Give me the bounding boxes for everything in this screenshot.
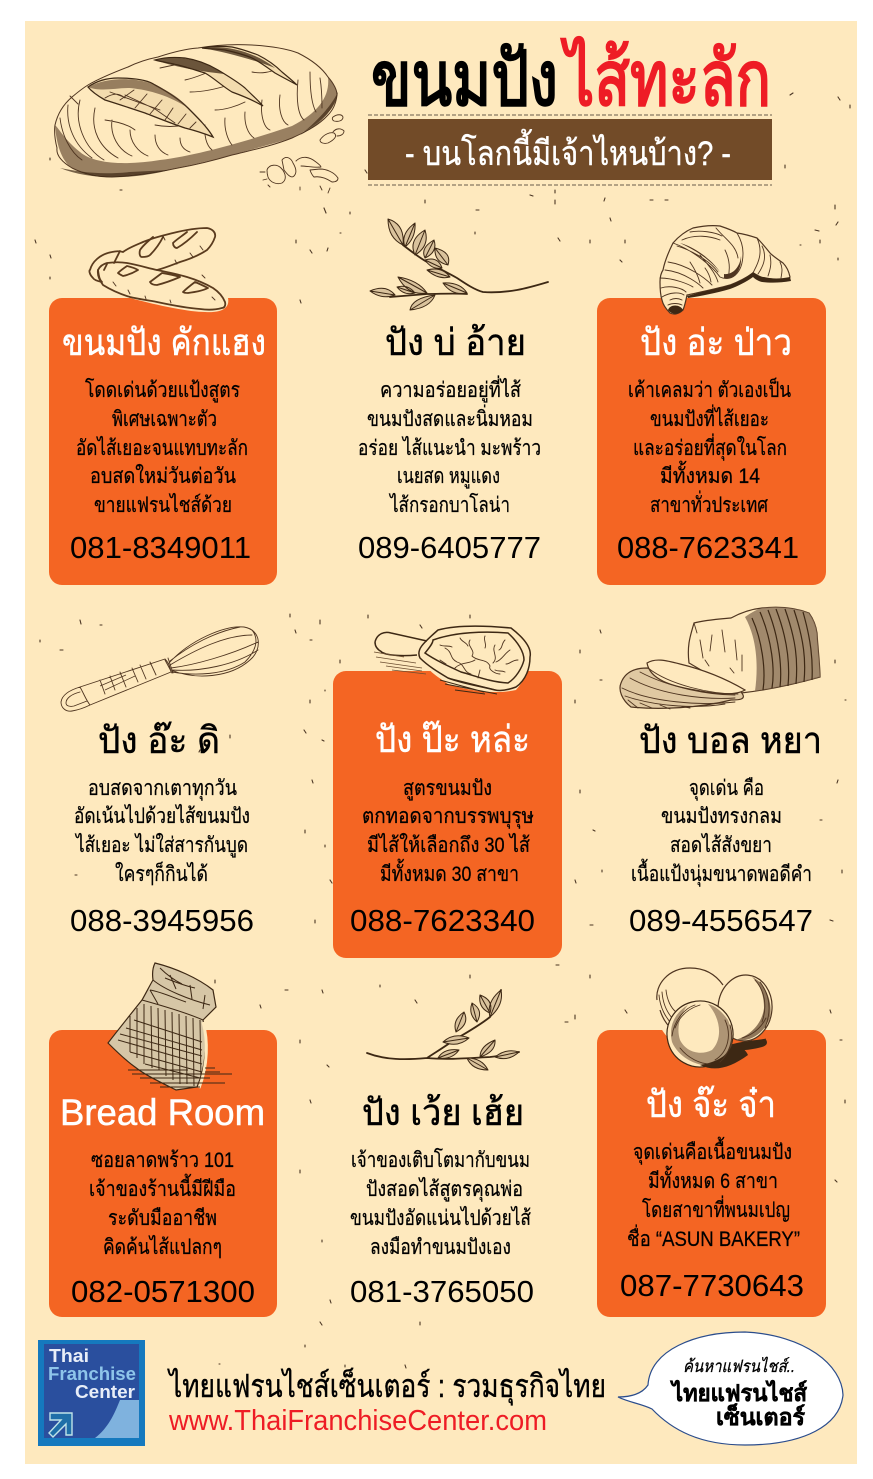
description: ความอร่อยอยู่ที่ไส้ xyxy=(380,375,521,403)
description: สอดไส้สังขยา xyxy=(670,833,772,857)
title xyxy=(371,35,771,122)
description: ขนมปังอัดแน่นไปด้วยไส้ xyxy=(350,1206,531,1230)
heading: ปัง เว้ย เฮ้ย xyxy=(362,1092,524,1133)
heading: ปัง อ๊ะ ดิ xyxy=(98,720,220,761)
panel: ปัง บอล หยา xyxy=(620,607,822,938)
phone: 088-3945956 xyxy=(70,903,254,938)
description: อัดไส้เยอะจนแทบทะลัก xyxy=(76,436,248,460)
phone: 089-4556547 xyxy=(629,903,813,938)
description xyxy=(631,777,812,887)
logo: Thai Franchise Center: Franchise xyxy=(48,1364,136,1384)
phone: 081-8349011 xyxy=(70,530,251,565)
description: เนื้อแป้งนุ่มขนาดพอดีคำ xyxy=(631,859,812,887)
icon: herb sprig xyxy=(370,219,548,310)
description: มีทั้งหมด 14 xyxy=(660,461,760,488)
panel: ปัง ป๊ะ หล่ะ xyxy=(333,626,562,958)
description: ขายแฟรนไชส์ด้วย xyxy=(94,493,232,517)
description: ไส้เยอะ ไม่ใส่สารกันบูด xyxy=(74,833,248,858)
icon: whisk xyxy=(61,627,258,711)
description: ขนมปังที่ไส้เยอะ xyxy=(650,404,769,431)
description: ระดับมืออาชีพ xyxy=(108,1207,217,1230)
footer text: www.ThaiFranchiseCenter.com xyxy=(168,1405,547,1437)
description xyxy=(350,1148,531,1259)
panel: ปัง เว้ย เฮ้ย xyxy=(350,990,534,1309)
description: เจ้าของร้านนี้มีฝีมือ xyxy=(89,1174,236,1201)
icon: eggs xyxy=(657,968,775,1074)
description: พิเศษเฉพาะตัว xyxy=(112,408,217,431)
description xyxy=(76,378,248,517)
phone: 089-6405777 xyxy=(358,530,541,565)
description: เค้าเคลมว่า ตัวเองเป็น xyxy=(628,376,791,402)
heading: ปัง อ่ะ ป่าว xyxy=(640,322,792,363)
description: ปังสอดไส้สูตรคุณพ่อ xyxy=(366,1177,523,1202)
description: ขนมปังสดและนิ่มหอม xyxy=(367,404,533,431)
description: ชื่อ “ASUN BAKERY” xyxy=(627,1224,800,1251)
logo: Thai Franchise Center: Thai xyxy=(49,1346,89,1366)
phone: 082-0571300 xyxy=(71,1274,255,1309)
icon: sliced bread xyxy=(620,607,820,709)
panel: ปัง อ๊ะ ดิ xyxy=(61,627,258,938)
footer text xyxy=(167,1367,606,1437)
footer text: ไทยแฟรนไชส์เซ็นเตอร์ : รวมธุรกิจไทย xyxy=(167,1367,606,1406)
phone: 087-7730643 xyxy=(620,1268,804,1303)
description xyxy=(362,777,534,886)
subtitle banner xyxy=(368,115,772,185)
icon: flour sack xyxy=(108,963,232,1090)
panel: ปัง บ่ อ้าย xyxy=(358,219,548,565)
heading: ขนมปัง คักแฮง xyxy=(62,322,266,363)
description: มีทั้งหมด 30 สาขา xyxy=(380,859,519,886)
description: อร่อย ไส้แนะนำ มะพร้าว xyxy=(358,436,541,460)
description: อบสดจากเตาทุกวัน xyxy=(88,777,237,801)
description: อบสดใหม่วันต่อวัน xyxy=(90,464,236,488)
description: จุดเด่นคือเนื้อขนมปัง xyxy=(633,1137,792,1165)
title: ขนมปัง xyxy=(371,37,558,122)
icon: baguettes xyxy=(89,228,228,312)
icon: flour scoop xyxy=(374,626,530,694)
subtitle banner: - บนโลกนี้มีเจ้าไหนบ้าง? - xyxy=(405,129,731,173)
speech bubble: ไทยแฟรนไชส์ xyxy=(669,1379,808,1406)
speech bubble xyxy=(618,1332,843,1445)
icon: herb sprig xyxy=(367,990,519,1070)
speech bubble: ค้นหาแฟรนไชส์.. xyxy=(683,1356,795,1376)
description xyxy=(74,777,250,886)
illustration: bread loaf xyxy=(55,45,344,193)
heading: ปัง จ๊ะ จ๋า xyxy=(646,1084,776,1125)
panel: Bread Room xyxy=(49,963,277,1317)
description: ลงมือทำขนมปังเอง xyxy=(370,1236,511,1259)
panel: ขนมปัง คักแฮง xyxy=(49,228,277,585)
description: และอร่อยที่สุดในโลก xyxy=(633,433,787,461)
description: ใครๆก็กินได้ xyxy=(115,860,208,886)
description: โดยสาขาที่พนมเปญ xyxy=(642,1195,790,1222)
heading: Bread Room xyxy=(60,1092,265,1133)
description xyxy=(358,375,541,517)
title: ไส้ทะลัก xyxy=(560,35,771,122)
logo: Thai Franchise Center xyxy=(38,1340,145,1446)
logo: Thai Franchise Center: Center xyxy=(75,1382,135,1402)
description: จุดเด่น คือ xyxy=(689,777,764,801)
description: เจ้าของเติบโตมากับขนม xyxy=(351,1148,530,1172)
description: ตกทอดจากบรรพบุรุษ xyxy=(362,805,534,829)
description: ขนมปังทรงกลม xyxy=(661,805,782,828)
description: ซอยลาดพร้าว 101 xyxy=(91,1149,234,1172)
description xyxy=(628,376,791,517)
description: มีทั้งหมด 6 สาขา xyxy=(648,1166,778,1193)
description: อัดเน้นไปด้วยไส้ขนมปัง xyxy=(74,804,250,828)
phone: 088-7623341 xyxy=(617,530,799,565)
description: สาขาทั่วประเทศ xyxy=(650,490,769,517)
phone: 088-7623340 xyxy=(350,903,535,938)
description: สูตรขนมปัง xyxy=(403,777,492,801)
heading: ปัง บ่ อ้าย xyxy=(385,322,526,363)
heading: ปัง ป๊ะ หล่ะ xyxy=(375,719,530,760)
speech bubble: เซ็นเตอร์ xyxy=(716,1402,806,1430)
description: ไส้กรอกบาโลน่า xyxy=(388,493,510,517)
description: คิดค้นไส้แปลกๆ xyxy=(103,1235,222,1259)
description: โดดเด่นด้วยแป้งสูตร xyxy=(85,378,240,403)
icon: croissant xyxy=(660,226,791,314)
panel: ปัง จ๊ะ จ๋า xyxy=(597,968,826,1317)
panel: ปัง อ่ะ ป่าว xyxy=(597,226,826,585)
description xyxy=(89,1149,236,1259)
description: เนยสด หมูแดง xyxy=(397,465,500,489)
description: มีไส้ให้เลือกถึง 30 ไส้ xyxy=(367,833,530,857)
heading: ปัง บอล หยา xyxy=(639,720,822,761)
phone: 081-3765050 xyxy=(350,1274,534,1309)
description xyxy=(627,1137,800,1251)
